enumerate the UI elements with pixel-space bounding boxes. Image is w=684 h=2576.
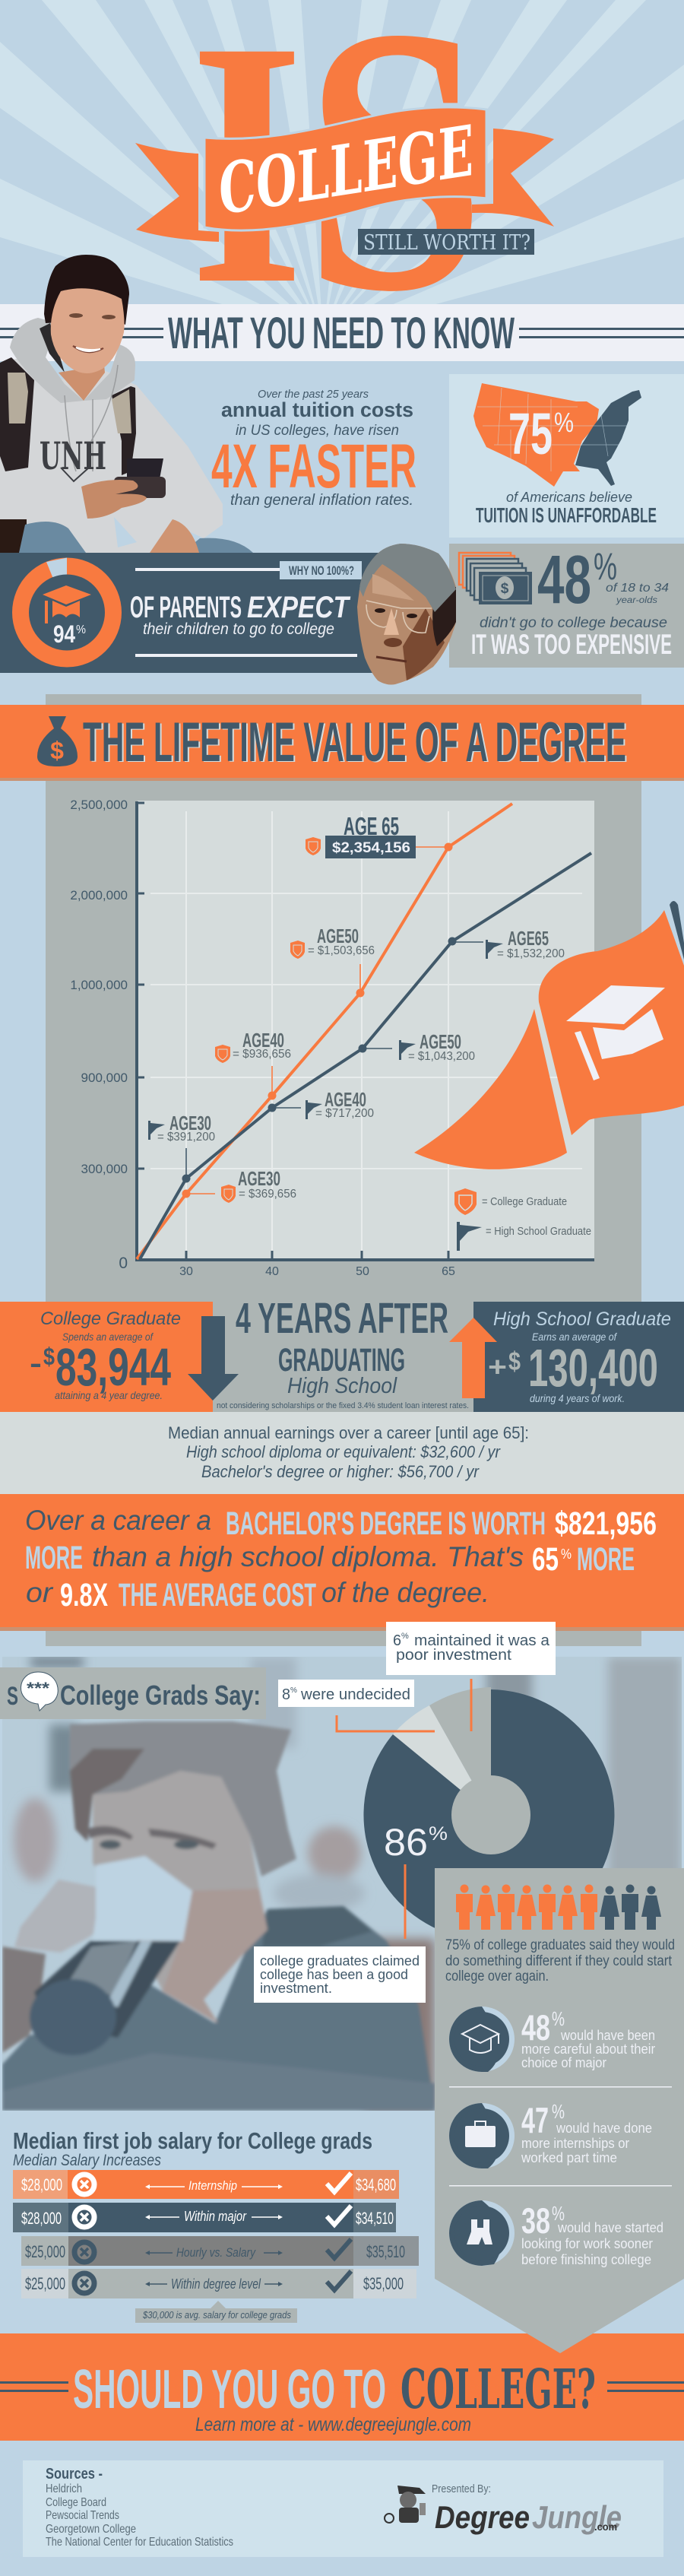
panel: bachelor's degree value: than a high school diploma. That's	[92, 1541, 524, 1572]
panel: bachelor's degree value: of the degree.	[321, 1577, 489, 1608]
row: internship: Internship	[188, 2178, 237, 2193]
text: sources: College Board	[46, 2496, 106, 2509]
subtitle: still worth it: STILL WORTH IT?	[363, 231, 530, 255]
x axis labels: 65	[442, 1265, 455, 1278]
heading: median first job salary: Median first job salary for College grads	[13, 2127, 372, 2154]
callout: age 40 high school	[306, 1088, 374, 1120]
logo: DegreeJungle: .com	[594, 2520, 617, 2533]
y axis labels: 300,000	[81, 1162, 128, 1176]
y axis labels: 1,000,000	[70, 978, 128, 992]
heading: should you go to college: Learn more at - www.degreejungle.com	[195, 2414, 471, 2435]
x axis labels: 40	[265, 1265, 279, 1278]
note: average salary: $30,000 is avg. salary for college grads	[142, 2309, 291, 2321]
callout: 8 percent undecided	[278, 1680, 414, 1707]
panel: high school graduate earnings: +	[488, 1351, 507, 1382]
chart: investment pie: %	[429, 1823, 448, 1845]
stat: 48 percent major: would have been	[560, 2028, 655, 2043]
text: sources	[46, 2466, 233, 2549]
text: tuition costs statistic	[211, 388, 416, 509]
callout: age 50 college: = $1,503,656	[308, 944, 375, 957]
panel: bachelor's degree value: or	[26, 1577, 54, 1608]
brows and eyes	[87, 1826, 133, 1840]
panel: would do something different	[435, 1868, 684, 2353]
callout: age 65 college: $2,354,156	[332, 840, 410, 856]
heading: median first job salary	[13, 2127, 372, 2169]
x axis labels: 50	[356, 1265, 369, 1278]
callout: good investment: investment.	[260, 1980, 332, 1996]
arrow: down	[188, 1316, 239, 1401]
text: sources: Sources -	[46, 2466, 103, 2482]
panel: parents expect: their children to go to college	[143, 620, 334, 638]
icon: money stack	[459, 553, 531, 604]
callout: 8 percent undecided: were undecided	[300, 1686, 410, 1703]
row: hourly vs salary	[21, 2236, 419, 2266]
panel: parents expect: EXPECT	[247, 591, 351, 624]
callout: age 50 high school	[399, 1030, 475, 1063]
row: within major: $34,510	[356, 2209, 394, 2228]
photo: student drinking beer	[2, 1657, 682, 2111]
line: college graduate	[137, 804, 512, 1259]
callout: why no 100	[280, 561, 362, 579]
row: within major: $28,000	[21, 2209, 62, 2228]
callout: 8 percent undecided: 8	[282, 1686, 290, 1703]
callout: age 30 college: AGE30	[238, 1167, 280, 1190]
panel: high school graduate earnings: High School Graduate	[493, 1309, 671, 1330]
stat: 38 percent looking for work: %	[552, 2202, 565, 2225]
text: 4 years after graduating high school: High School	[287, 1374, 397, 1398]
x axis labels	[179, 1265, 455, 1278]
panel: parents expect: OF PARENTS	[130, 591, 242, 624]
UNH print: UNH	[40, 433, 106, 478]
panel: 75 percent map: %	[554, 407, 574, 438]
chart: investment pie: 86	[384, 1821, 428, 1864]
row: within major: Within major	[184, 2209, 247, 2224]
hair	[70, 1721, 296, 1876]
stat: 48 percent major: 48	[521, 2007, 550, 2048]
panel: bachelor's degree value: 65	[532, 1541, 559, 1578]
panel: 48 percent too expensive	[449, 542, 684, 668]
arrow: up	[449, 1318, 497, 1398]
background sun rays	[0, 0, 684, 335]
stat: 47 percent internships: would have done	[556, 2121, 652, 2136]
heading: college grads say: S	[7, 1682, 18, 1711]
stat: 48 percent major	[449, 2007, 655, 2072]
panel: high school graduate earnings: during 4 years of work.	[530, 1392, 625, 1404]
panel: bachelor's degree value: 9.8X	[60, 1577, 108, 1613]
callout: why no 100: WHY NO 100%?	[289, 563, 354, 578]
row: within degree level: $35,000	[363, 2274, 404, 2293]
stat: 47 percent internships: %	[552, 2100, 565, 2123]
panel: college graduate cost: $	[43, 1343, 55, 1370]
panel: white box 6 percent: maintained it was a	[414, 1632, 550, 1649]
callout: age 50 high school: AGE50	[420, 1030, 461, 1053]
logo: DegreeJungle: Jungle	[532, 2499, 622, 2535]
callout: age 40 high school: = $717,200	[315, 1107, 374, 1120]
head	[44, 255, 129, 325]
stat: 47 percent internships	[449, 2100, 652, 2168]
note: average salary	[135, 2301, 297, 2323]
panel: 48 percent too expensive: %	[594, 545, 617, 588]
panel: college graduate cost: -	[30, 1347, 42, 1378]
text: 4 years after graduating high school: GRADUATING	[278, 1342, 405, 1378]
panel: bachelor's degree value: MORE	[577, 1541, 635, 1578]
y axis labels: 2,500,000	[70, 798, 128, 812]
callout: age 30 high school: = $391,200	[157, 1131, 215, 1144]
panel: median annual earnings: Median annual earnings over a career [until age 65]:	[168, 1423, 529, 1442]
text: sources: The National Center for Education Statistics	[46, 2536, 233, 2549]
callout: age 30 high school	[148, 1112, 215, 1144]
panel: high school graduate earnings	[473, 1302, 684, 1412]
callout: good investment	[254, 1946, 426, 2003]
callout: age 30 college	[221, 1167, 296, 1203]
panel: white box 6 percent: poor investment	[396, 1647, 511, 1664]
row: within degree level: Within degree level	[171, 2276, 261, 2292]
heading: median first job salary: Median Salary Increases	[13, 2152, 161, 2169]
row: internship: $34,680	[356, 2175, 396, 2194]
stat: 47 percent internships: more internships or	[521, 2136, 629, 2151]
stat: 38 percent looking for work: looking for work sooner	[521, 2236, 653, 2251]
title ribbon: College	[135, 107, 554, 242]
stat: 47 percent internships: worked part time	[521, 2150, 617, 2165]
icon: US map	[473, 383, 641, 487]
legend: = College Graduate	[482, 1195, 567, 1208]
panel: median annual earnings	[0, 1412, 684, 1494]
callout: age 40 college: AGE40	[242, 1029, 284, 1052]
heading band: what you need to know	[0, 304, 684, 361]
panel: college graduate cost: Spends an average of	[62, 1331, 154, 1343]
callout: age 65 high school	[486, 927, 565, 960]
text: sources: Heldrich	[46, 2482, 82, 2495]
heading: college grads say	[0, 1667, 266, 1719]
row: internship: $28,000	[21, 2175, 62, 2194]
panel: bachelor's degree value: MORE	[25, 1540, 83, 1576]
stat: 48 percent major: %	[552, 2007, 565, 2030]
panel: median annual earnings: Bachelor's degree or higher: $56,700 / yr	[201, 1462, 480, 1481]
callout: age 65 high school: AGE65	[508, 927, 549, 950]
text: 4 years after graduating high school	[217, 1294, 469, 1410]
row: within major	[13, 2203, 396, 2232]
y axis labels	[70, 798, 128, 1272]
panel: white box 6 percent	[386, 1622, 556, 1675]
text: 4 years after graduating high school: not considering scholarships or the fixed 3.4% student loan interest rates.	[217, 1401, 469, 1410]
heading: college grads say: ***	[27, 1679, 50, 1698]
icon: big graduation flag	[414, 901, 684, 1169]
panel: 75 percent map: 75	[508, 401, 553, 467]
stat: 48 percent major: more careful about their	[521, 2041, 655, 2057]
panel: bachelor's degree value: Over a career a	[25, 1505, 211, 1536]
backpack straps	[0, 357, 34, 471]
chart: 94 percent donut: 94	[53, 620, 75, 648]
text: tuition costs statistic: 4X FASTER	[211, 432, 416, 501]
row: hourly vs salary: Hourly vs. Salary	[176, 2245, 256, 2260]
panel: median annual earnings: High school diploma or equivalent: $32,600 / yr	[186, 1442, 502, 1461]
callout: age 30 college: = $369,656	[239, 1188, 296, 1201]
callout: age 40 high school: AGE40	[325, 1088, 366, 1111]
chart: lifetime earnings	[70, 798, 594, 1278]
heading: college grads say: College Grads Say:	[60, 1680, 261, 1711]
lower hand and face	[2, 1946, 46, 2053]
stat: 38 percent looking for work: before finishing college	[521, 2252, 651, 2267]
chart: 94 percent donut	[12, 558, 122, 668]
text: sources: Georgetown College	[46, 2523, 136, 2536]
icon: money stack: $	[501, 581, 509, 597]
x axis labels: 30	[179, 1265, 193, 1278]
panel: parents expect	[0, 553, 388, 673]
panel: college graduate cost: attaining a 4 year degree.	[55, 1389, 163, 1401]
y axis labels: 0	[119, 1255, 128, 1272]
y axis labels: 2,000,000	[70, 888, 128, 903]
icon: money bag	[37, 716, 78, 766]
panel: 48 percent too expensive: year-olds	[616, 595, 657, 605]
panel: 48 percent too expensive: of 18 to 34	[606, 582, 669, 595]
panel: 48 percent too expensive: 48	[537, 542, 591, 618]
text: tuition costs statistic: in US colleges, have risen	[236, 423, 399, 439]
panel: would do something different: college over again.	[445, 1968, 549, 1984]
panel: college graduate cost	[0, 1302, 213, 1412]
y axis labels: 900,000	[81, 1071, 128, 1085]
stat: 47 percent internships: 47	[521, 2100, 549, 2140]
logo: DegreeJungle: Presented By:	[432, 2482, 491, 2495]
panel: college graduate cost: College Graduate	[40, 1309, 181, 1329]
title: IS	[190, 0, 486, 370]
neck and lines	[59, 365, 105, 401]
panel: white box 6 percent: %	[401, 1632, 409, 1641]
chart: 94 percent donut: %	[76, 623, 86, 636]
panel: bachelor's degree value: %	[561, 1547, 572, 1562]
callout: 8 percent undecided: %	[290, 1686, 297, 1695]
text: 4 years after graduating high school: 4 YEARS AFTER	[236, 1294, 448, 1343]
jeans and arm	[0, 519, 27, 553]
chart: investment pie	[337, 1679, 614, 1940]
callout: age 65 college: AGE 65	[344, 812, 399, 840]
callout: age 65 high school: = $1,532,200	[497, 947, 565, 960]
row: within degree level	[21, 2269, 416, 2298]
text: tuition costs statistic: than general inflation rates.	[230, 492, 413, 509]
hand	[14, 1880, 108, 1953]
row: internship	[13, 2170, 399, 2199]
text: tuition costs statistic: Over the past 25 years	[258, 388, 369, 401]
panel: bachelor's degree value: THE AVERAGE COST	[119, 1577, 316, 1613]
line: high school graduate	[140, 853, 591, 1259]
callout: age 30 high school: AGE30	[169, 1112, 211, 1134]
panel: 48 percent too expensive: didn't go to college because	[480, 615, 667, 631]
text: tuition costs statistic: annual tuition costs	[221, 398, 413, 421]
callout: age 40 college: = $936,656	[233, 1048, 291, 1061]
photo: older man's face	[357, 544, 456, 684]
callout: age 50 college: AGE50	[317, 925, 359, 947]
panel: college graduate cost: 83,944	[55, 1337, 171, 1397]
row: hourly vs salary: $25,000	[25, 2242, 65, 2261]
stat: 48 percent major: choice of major	[521, 2055, 606, 2070]
stat: 38 percent looking for work: 38	[521, 2200, 550, 2241]
shirt	[2, 1910, 432, 2092]
panel: 75 percent map: of Americans believe	[506, 490, 632, 505]
legend	[454, 1188, 591, 1251]
heading: should you go to college: SHOULD YOU GO TO	[73, 2359, 386, 2420]
callout: good investment: college graduates claimed	[260, 1953, 420, 1968]
callout: age 65 college	[306, 812, 416, 858]
legend: = High School Graduate	[486, 1225, 591, 1238]
hood	[10, 318, 84, 403]
panel: bachelor's degree value	[0, 1494, 684, 1631]
callout: age 50 high school: = $1,043,200	[408, 1050, 475, 1063]
band: should you go to college	[0, 2333, 684, 2441]
panel: sources and presenter	[23, 2460, 663, 2557]
panel: grey chart background	[46, 694, 641, 1646]
stat: 38 percent looking for work	[449, 2200, 663, 2267]
row: within degree level: $25,000	[25, 2274, 65, 2293]
callout: age 50 college	[290, 925, 375, 959]
photo: student with phone	[0, 255, 253, 553]
panel: 75 percent map	[449, 374, 684, 538]
logo: DegreeJungle: Degree	[435, 2499, 530, 2535]
row: hourly vs salary: $35,510	[366, 2242, 405, 2261]
stat: 38 percent looking for work: would have started	[557, 2220, 663, 2235]
mug	[34, 1941, 180, 2038]
icon row: ten people	[456, 1884, 661, 1930]
phone	[127, 458, 163, 479]
callout: good investment: college has been a good	[260, 1966, 408, 1982]
callout: age 40 college	[215, 1029, 291, 1063]
logo: DegreeJungle	[385, 2482, 622, 2535]
icon: money bag: $	[50, 737, 64, 764]
heading: should you go to college	[0, 2357, 684, 2435]
title ribbon: College: COLLEGE	[219, 109, 473, 231]
panel: high school graduate earnings: Earns an average of	[532, 1331, 618, 1343]
text: sources: Pewsocial Trends	[46, 2509, 119, 2522]
panel: high school graduate earnings: $	[508, 1347, 521, 1376]
panel: white box 6 percent: 6	[393, 1632, 401, 1649]
